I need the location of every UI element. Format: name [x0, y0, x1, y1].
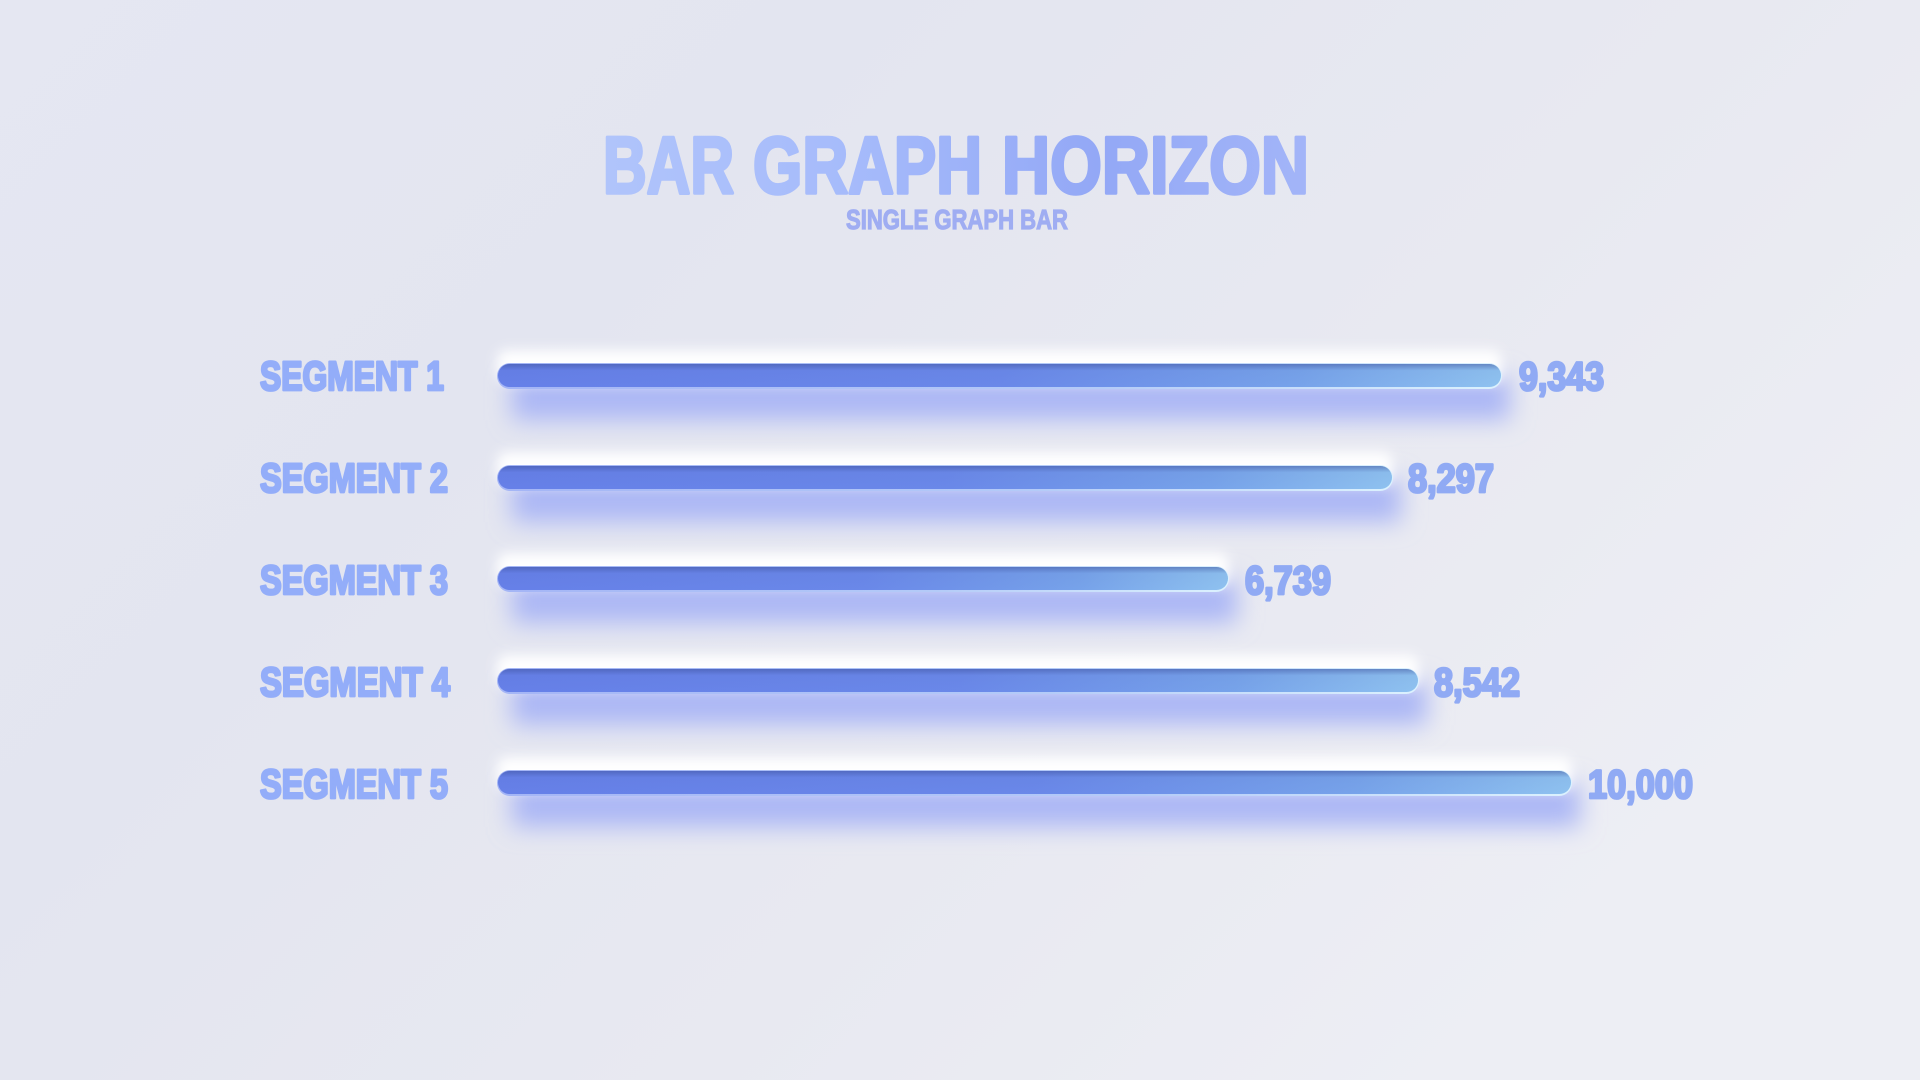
row: segment 5 — [260, 757, 1693, 827]
label: segment 2: SEGMENT 2 — [260, 455, 448, 501]
title — [603, 121, 1309, 211]
bar: segment 4 — [497, 655, 1427, 725]
title: GRAPH — [753, 121, 982, 211]
value: 9,343: 9,343 — [1519, 355, 1604, 399]
value: 8,297: 8,297 — [1408, 457, 1494, 501]
bar: segment 2 — [497, 452, 1401, 522]
label: segment 1: SEGMENT 1 — [260, 353, 444, 399]
bar: segment 3 — [497, 553, 1237, 623]
bar: segment 1 — [497, 350, 1510, 420]
label: segment 5: SEGMENT 5 — [260, 761, 448, 807]
title: HORIZON — [1002, 121, 1309, 211]
label: segment 4: SEGMENT 4 — [260, 659, 450, 705]
value: 6,739: 6,739 — [1245, 559, 1331, 603]
subtitle: SINGLE GRAPH BAR — [846, 204, 1068, 235]
row: segment 1 — [260, 350, 1604, 420]
row: segment 2 — [260, 452, 1494, 522]
label: segment 3: SEGMENT 3 — [260, 557, 448, 603]
value: 10,000: 10,000 — [1588, 763, 1693, 807]
bar: segment 5 — [497, 757, 1580, 827]
row: segment 3 — [260, 553, 1331, 623]
bar chart — [260, 350, 1693, 827]
title: BAR — [603, 121, 734, 211]
row: segment 4 — [260, 655, 1520, 725]
value: 8,542: 8,542 — [1434, 661, 1520, 705]
